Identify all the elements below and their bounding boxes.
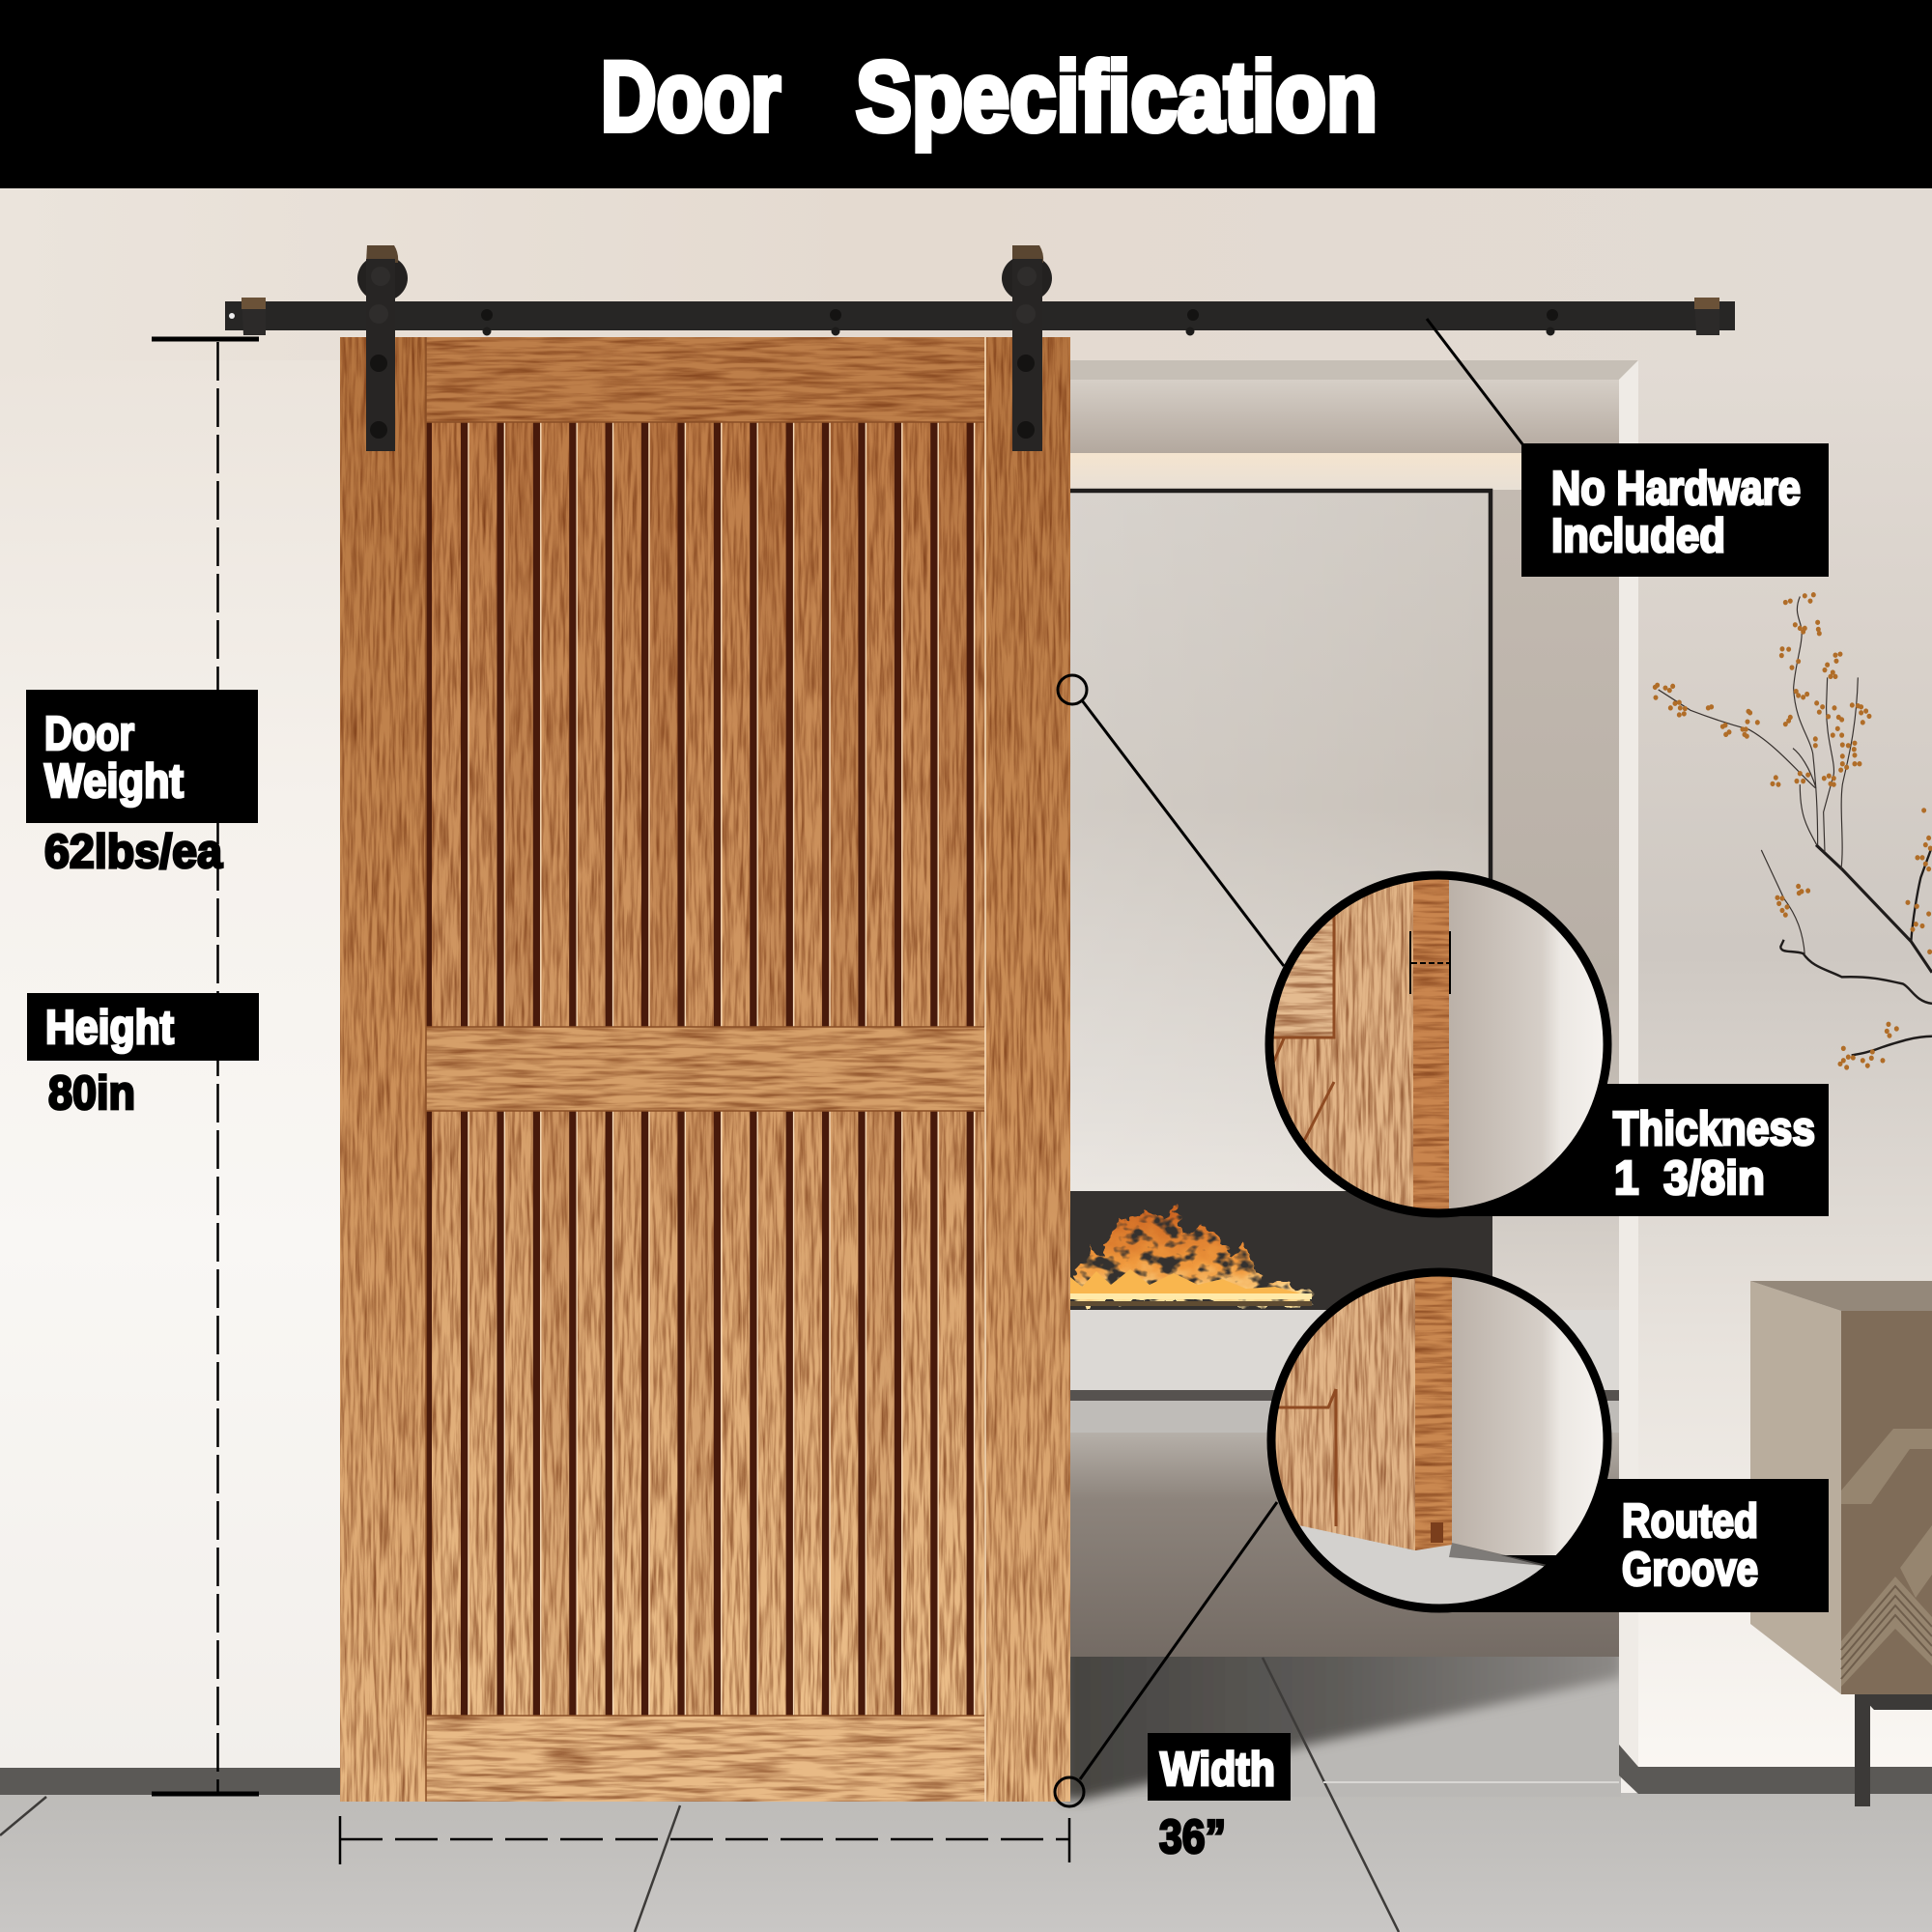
track spacers — [487, 327, 1550, 336]
callout line: routed groove — [1080, 1502, 1277, 1779]
cove light — [1070, 453, 1619, 490]
fireplace — [1070, 1191, 1492, 1310]
value: height: 80in — [48, 1067, 135, 1120]
inset panel — [1274, 918, 1333, 1036]
door face — [1273, 881, 1413, 1208]
lower wall — [1070, 1310, 1619, 1391]
inset floor — [1299, 1525, 1544, 1604]
cabinet front — [1841, 1311, 1932, 1694]
label: height: Height — [45, 1002, 174, 1054]
right wall — [1638, 360, 1932, 1771]
marker: thickness point — [1058, 675, 1087, 704]
value: door weight: 62lbs/ea — [44, 826, 223, 878]
height dimension line — [152, 339, 259, 1794]
inset: thickness detail — [1265, 869, 1618, 1222]
plant branches with berries — [1655, 595, 1932, 1067]
inner right wall — [1492, 490, 1619, 1310]
barn door track hardware — [225, 245, 1735, 451]
left baseboard — [0, 1768, 340, 1795]
callout line: hardware — [1427, 319, 1523, 445]
cabinet relief strips — [1841, 1429, 1932, 1687]
track stoppers — [242, 298, 266, 335]
label text: routed groove — [1622, 1495, 1758, 1596]
label text: thickness: 1 3/8in — [1614, 1152, 1765, 1205]
door edge — [1415, 1265, 1452, 1550]
thickness marker — [1410, 931, 1450, 994]
cabinet top — [1750, 1281, 1932, 1311]
glass panel — [1070, 491, 1492, 1191]
door edge — [1413, 869, 1449, 1222]
width dimension line — [340, 1816, 1069, 1864]
cabinet — [1750, 1281, 1932, 1806]
icon: fireplace flames — [1070, 1208, 1312, 1306]
title: Specification — [856, 42, 1378, 152]
label: no hardware included: No Hardware — [1551, 463, 1801, 515]
label: width: Width — [1160, 1744, 1275, 1796]
label: door weight — [26, 690, 258, 823]
vertical slats — [432, 422, 984, 1716]
value: width: 36” — [1159, 1811, 1226, 1863]
back floor — [1070, 1401, 1619, 1433]
header band — [0, 0, 1932, 188]
title: Door — [601, 42, 781, 152]
label: height — [27, 993, 259, 1061]
floor — [0, 1793, 1932, 1932]
label text: routed groove: Routed — [1622, 1495, 1758, 1548]
right stile — [985, 337, 1070, 1802]
track bar — [225, 301, 1735, 330]
label: routed groove box — [1439, 1479, 1829, 1612]
right hanger — [1002, 245, 1052, 451]
groove slot — [1431, 1522, 1443, 1543]
shadow on floor — [1063, 1642, 1623, 1800]
cabinet legs — [1855, 1694, 1932, 1806]
barn door — [340, 337, 1070, 1802]
bottom rail — [426, 1716, 985, 1802]
middle rail — [426, 1027, 985, 1111]
label text: thickness: Thickness — [1613, 1103, 1815, 1155]
opening back wall — [1070, 380, 1619, 453]
label: thickness box — [1438, 1084, 1829, 1216]
label text: thickness — [1613, 1103, 1815, 1205]
rug — [1070, 1433, 1619, 1657]
back baseboard — [1070, 1390, 1619, 1401]
left hanger — [357, 245, 408, 451]
label: no hardware included: Included — [1551, 510, 1725, 562]
opening soffit — [1070, 360, 1638, 380]
tile lines — [0, 1658, 1399, 1932]
inset: routed groove detail — [1265, 1265, 1616, 1613]
label: door weight: Door — [44, 708, 134, 760]
label: door weight: Weight — [44, 755, 184, 808]
label: no hardware included — [1521, 443, 1829, 577]
label text: routed groove: Groove — [1622, 1544, 1758, 1596]
marker: width point — [1055, 1777, 1084, 1806]
left stile — [340, 337, 426, 1802]
callout line: thickness — [1082, 700, 1284, 966]
door face — [1275, 1278, 1415, 1550]
glass frame — [1070, 491, 1491, 1191]
top rail — [426, 337, 985, 422]
opening right jamb — [1619, 360, 1638, 1767]
right baseboard — [1619, 1745, 1932, 1794]
cabinet side — [1750, 1281, 1841, 1694]
opening floor — [1070, 1642, 1621, 1797]
title — [601, 42, 1378, 152]
door panel backing — [426, 422, 985, 1716]
